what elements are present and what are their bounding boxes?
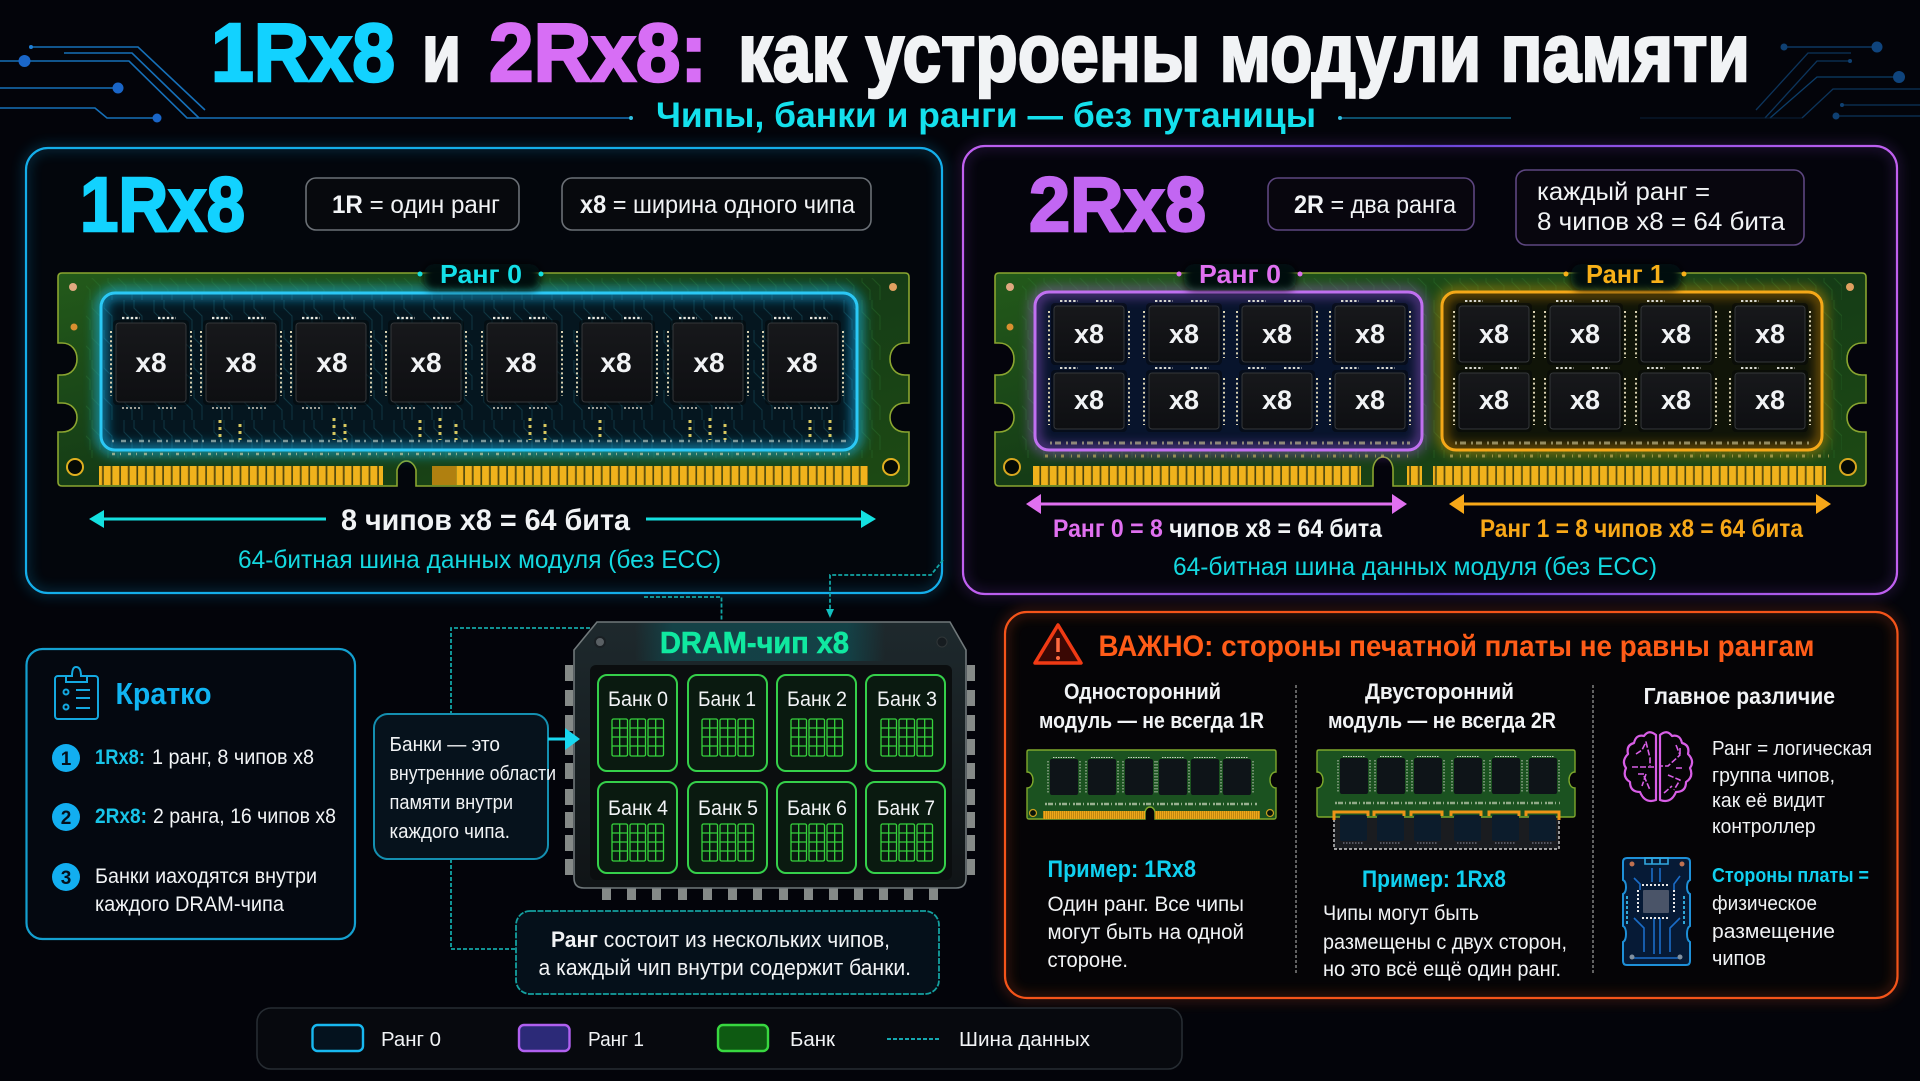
bank 6 [777,782,856,873]
chips rank 1: x8 [1570,319,1600,349]
item 3: 3 [61,868,71,889]
column: double-sided: Двусторонний [1365,679,1514,704]
column: main difference: чипов [1712,947,1766,970]
item 3 [52,863,317,916]
title: как устроены модули памяти [738,6,1750,99]
chips: x8 [786,347,818,378]
column: double-sided: модуль — не всегда 2R [1328,708,1556,733]
DIMM module 1Rx8 [58,259,909,486]
bank 1 [688,675,767,771]
rank 1 formula: Ранг 1 = 8 чипов x8 = 64 бита [1480,515,1804,543]
title: и [422,6,461,99]
chips: x8 [410,347,442,378]
item 2: 2 [61,808,71,829]
legend: rank 0: Ранг 0 [381,1029,441,1051]
gold contacts [99,466,868,485]
chips: x8 [693,347,725,378]
bank 7: Банк 7 [877,797,935,820]
pill: x8 [562,178,871,230]
pill: 2R [1268,178,1474,230]
legend: bank: Банк [790,1029,835,1051]
item 1: 1 ранг, 8 чипов x8 [152,746,314,769]
rank 0 formula: Ранг 0 = 8 чипов x8 = 64 бита [1053,515,1383,543]
bank 4: Банк 4 [608,797,668,820]
column: single-sided: могут быть на одной [1048,921,1244,944]
chips rank 0: x8 [1262,319,1292,349]
item 3: каждого DRAM-чипа [95,893,284,916]
label: rank 0: Ранг 0 [440,259,522,289]
rank 1 highlight [1442,292,1822,450]
column: main difference [1623,683,1872,970]
callout: rank: Ранг состоит из нескольких чипов, [551,927,890,952]
chips rank 0: x8 [1355,385,1385,415]
panel frame [963,146,1897,594]
label: rank 1 [1564,259,1686,290]
item 1 [52,744,314,772]
column: single-sided [1027,679,1276,972]
column: main difference: Ранг = логическая [1712,737,1872,760]
chips rank 1: x8 [1661,319,1691,349]
arrow: rank 0 width [1026,494,1407,514]
legend [257,1008,1182,1069]
chips rank 1: x8 [1661,385,1691,415]
bank 3 [866,675,945,771]
legend: data bus: Шина данных [959,1029,1090,1051]
column: single-sided: Один ранг. Все чипы [1048,893,1244,916]
item 2 [52,803,336,831]
label: rank 0: Ранг 0 [1199,259,1281,289]
legend: rank 1 [519,1025,644,1051]
chip title: DRAM-чип x8 [660,625,849,660]
heading 2Rx8: 2Rx8 [1029,162,1206,248]
chips rank 1: x8 [1479,385,1509,415]
column: main difference: физическое [1712,892,1817,915]
arrow: rank 1 width [1449,494,1831,514]
panel: important [1005,612,1898,998]
chips rank 1 [1454,301,1810,432]
circuit decoration: right [1604,42,1920,120]
legend: bank [718,1025,835,1051]
chip body [574,622,966,888]
column: single-sided: Пример: 1Rx8 [1048,856,1196,883]
chips: x8 [600,347,632,378]
DRAM chip [565,622,975,900]
pill: each rank: каждый ранг = [1537,178,1710,206]
legend: rank 1: Ранг 1 [588,1029,644,1051]
pill: each rank: 8 чипов x8 = 64 бита [1537,208,1785,236]
column: double-sided: Пример: 1Rx8 [1362,866,1506,893]
bank 2 [777,675,856,771]
title [211,6,1750,99]
bank 2: Банк 2 [787,688,847,711]
chips: x8 [505,347,537,378]
side pins [565,665,975,900]
callout: banks: внутренние области [390,763,556,785]
bank 1: Банк 1 [698,688,756,711]
DIMM module 2Rx8 [995,259,1866,486]
panel frame [26,148,942,593]
panel: summary [26,649,355,939]
label: rank 1: Ранг 1 [1586,259,1664,289]
column: main difference: контроллер [1712,815,1816,838]
column: main difference: Стороны платы = [1712,864,1869,887]
panel: 1Rx8 [26,148,942,593]
title: 1Rx8 [211,6,395,99]
bank 5: Банк 5 [698,797,758,820]
PCB board [995,273,1866,486]
circuit decoration: left [0,45,633,122]
title: 2Rx8: [489,6,707,99]
chips rank 0: x8 [1074,385,1104,415]
chips rank 0: x8 [1262,385,1292,415]
summary heading: Кратко [116,676,212,711]
arrow: callout to banks [548,728,580,750]
bank 3: Банк 3 [877,688,937,711]
subtitle: Чипы, банки и ранги — без путаницы [656,96,1316,135]
rank 0 highlight [1035,292,1422,450]
column: single-sided: стороне. [1048,949,1128,972]
width arrow [89,504,876,537]
chips rank 0: x8 [1169,385,1199,415]
callout: banks: каждого чипа. [390,821,510,843]
column: double-sided [1317,679,1575,981]
chips [111,318,843,408]
legend: rank 0 [312,1025,441,1051]
item 1: 1Rx8: [95,746,145,769]
column: double-sided: но это всё ещё один ранг. [1323,958,1561,981]
callout: rank [516,911,939,994]
item 2: 2 ранга, 16 чипов x8 [153,805,336,828]
chips rank 0: x8 [1074,319,1104,349]
panel frame [1005,612,1898,998]
small module 1 [1027,750,1276,819]
chips rank 0 [1049,301,1410,432]
chips: x8 [135,347,167,378]
bank 6: Банк 6 [787,797,847,820]
bank 0: Банк 0 [608,688,668,711]
label: rank 0 [418,259,544,290]
item 2: 2Rx8: [95,805,147,828]
heading 1Rx8: 1Rx8 [80,162,245,248]
bus note: 64-битная шина данных модуля (без ECC) [1173,553,1657,581]
label: rank 0 [1176,259,1302,290]
column: double-sided: Чипы могут быть [1323,902,1479,925]
icon: brain [1624,732,1692,801]
column: main difference: группа чипов, [1712,764,1835,787]
item 1: 1 [61,749,72,770]
chips: x8 [225,347,257,378]
gold contacts [1033,466,1826,485]
rank 0 highlight [101,293,857,450]
item 3: Банки иаходятся внутри [95,865,317,888]
bank 5 [688,782,767,873]
width arrow: 8 чипов x8 = 64 бита [341,504,630,537]
icon: chip board [1623,858,1690,965]
pill: 1R [306,178,519,230]
chips rank 1: x8 [1755,319,1785,349]
chips rank 0: x8 [1355,319,1385,349]
callout: banks [374,714,556,859]
chips rank 1: x8 [1755,385,1785,415]
bank 7 [866,782,945,873]
callout: rank: а каждый чип внутри содержит банки. [538,955,911,980]
pill: each rank [1516,170,1804,245]
chips: x8 [316,347,348,378]
data bus dashed connectors [451,560,943,949]
column: main difference: как её видит [1712,789,1826,812]
pill: 2R: 2R = два ранга [1294,191,1456,219]
panel: 2Rx8 [963,146,1897,594]
pill: 1R: 1R = один ранг [332,191,500,219]
small module 2 [1317,750,1575,849]
chips rank 1: x8 [1570,385,1600,415]
chips rank 1: x8 [1479,319,1509,349]
pill: x8: x8 = ширина одного чипа [580,191,855,219]
PCB board [58,273,909,486]
icon: warning [1035,625,1081,663]
callout: banks: Банки — это [390,734,500,756]
warning heading: ВАЖНО: стороны печатной платы не равны рангам [1098,630,1814,663]
chips rank 0: x8 [1169,319,1199,349]
bank 4 [598,782,677,873]
column: double-sided: размещены с двух сторон, [1323,931,1567,954]
icon: clipboard [55,667,98,719]
column: main difference: размещение [1712,920,1835,943]
column: single-sided: модуль — не всегда 1R [1039,708,1264,733]
bus note: 64-битная шина данных модуля (без ECC) [238,546,721,574]
bank 0 [598,675,677,771]
column: single-sided: Односторонний [1064,679,1221,704]
column: main difference: Главное различие [1644,683,1835,709]
callout: banks: памяти внутри [390,792,513,814]
